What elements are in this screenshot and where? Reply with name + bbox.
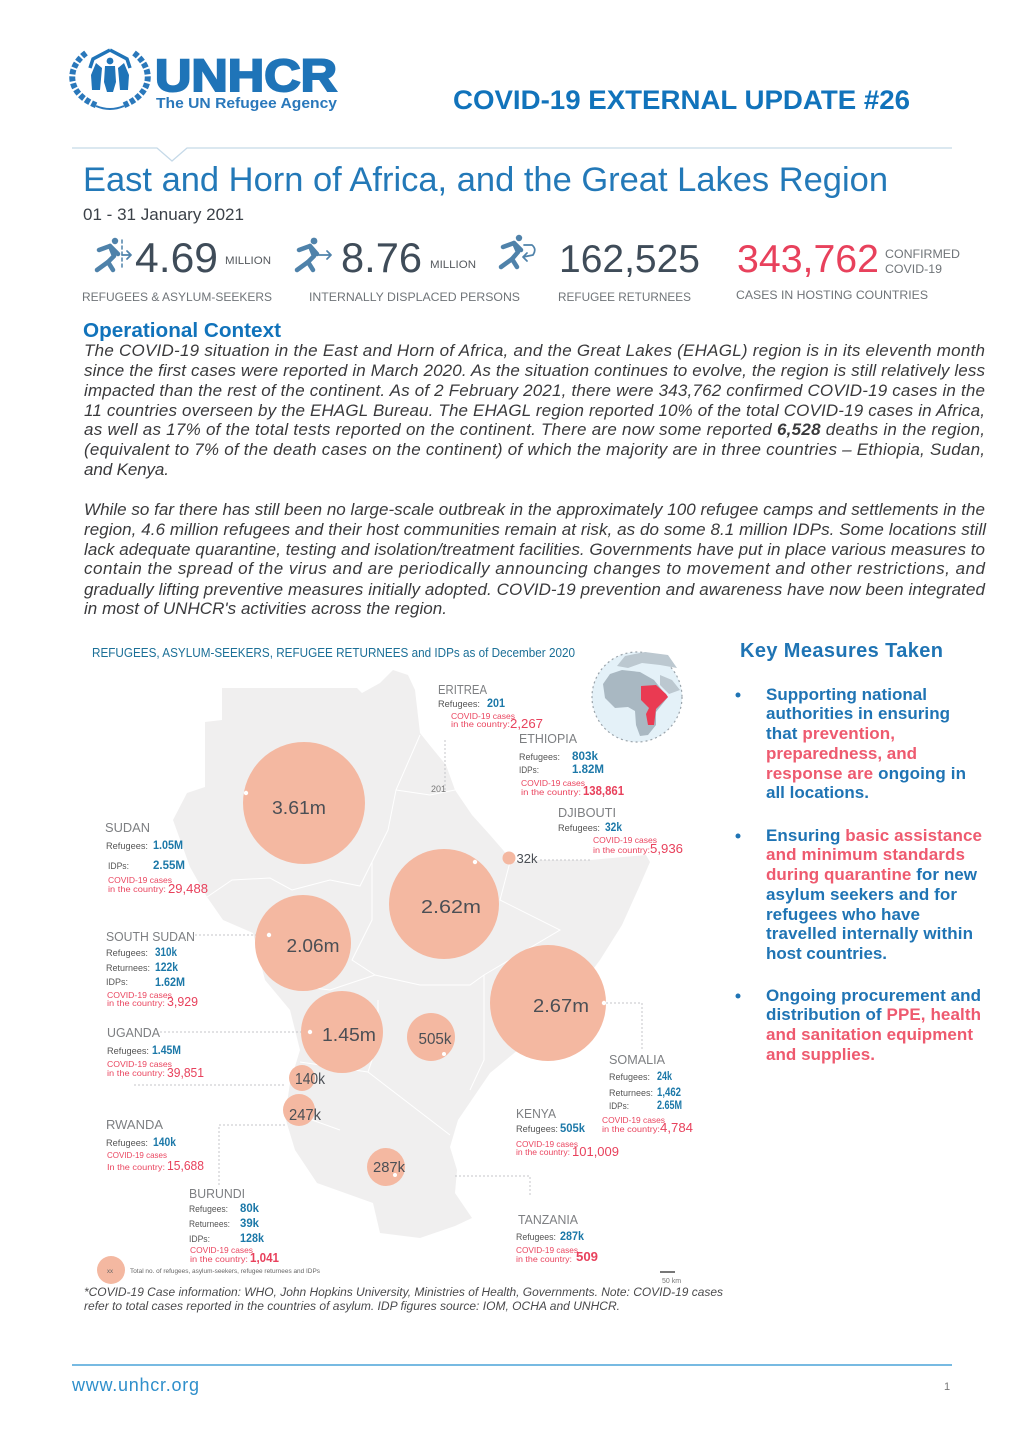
label: Eritrea on map: 201	[431, 784, 446, 794]
country panel: Ethiopia: ETHIOPIA	[519, 732, 578, 746]
bullet: procurement: Ongoing procurement and	[766, 986, 981, 1005]
country panel: Burundi: BURUNDI	[189, 1187, 245, 1201]
country panel: Tanzania: COVID-19 cases	[516, 1245, 578, 1255]
bullet: basic assistance: and minimum standards	[766, 845, 965, 864]
country panel: Sudan: 29,488	[168, 882, 208, 896]
country panel: Tanzania: TANZANIA	[518, 1213, 579, 1227]
country panel: Uganda	[107, 1026, 204, 1080]
country panel: Somalia: 2.65M	[657, 1100, 682, 1112]
Europe and Arabia	[617, 652, 680, 694]
footnote: *COVID-19 Case information: WHO, John Hopkins University, Ministries of Health, Governments. Note: COVID-19 cases	[84, 1287, 723, 1299]
text block: paragraph 1: (equivalent to 7% of the death cases on the continent) of which the majority are in three countries – Ethiopia, Sudan,	[84, 440, 985, 459]
bubble: Uganda: 1.45m	[322, 1025, 376, 1045]
bubble: Rwanda: 140k	[295, 1071, 326, 1088]
country panel: South Sudan: Refugees:	[106, 948, 148, 958]
country panel: South Sudan: 1.62M	[155, 977, 185, 989]
country panel: Tanzania: 509	[576, 1250, 598, 1264]
bullet: procurement	[736, 986, 981, 1064]
bullet: national authorities: response are ongoing in	[766, 764, 966, 783]
stat: internally displaced persons: 8.76	[341, 234, 422, 281]
bullet: national authorities: Supporting national	[766, 685, 927, 704]
Africa	[603, 670, 668, 736]
bubble: Djibouti	[502, 851, 538, 866]
bullet: basic assistance: host countries.	[766, 944, 887, 963]
country panel: Ethiopia	[519, 732, 624, 798]
stat: refugee returnees: REFUGEE RETURNEES	[558, 290, 691, 304]
scale bar: 50 km	[662, 1278, 681, 1285]
bullet: basic assistance: during quarantine for new	[766, 865, 978, 884]
icon: person with arrow	[297, 238, 331, 270]
bullet: national authorities: that prevention,	[766, 724, 895, 743]
country panel: Ethiopia: 138,861	[583, 784, 624, 798]
bubble: South Sudan: 2.06m	[286, 936, 340, 956]
text block: paragraph 1: since the first cases were reported in March 2020. As the situation continues to evolve, the region is still relatively less	[84, 361, 986, 380]
country panel: Tanzania: in the country:	[516, 1254, 572, 1264]
bullet: procurement: and sanitation equipment	[766, 1025, 973, 1044]
country panel: Rwanda: In the country:	[107, 1162, 165, 1172]
country panel: Djibouti: COVID-19 cases	[593, 835, 657, 845]
footnote: refer to total cases reported in the countries of asylum. IDP figures source: IOM, OCHA and UNHCR.	[84, 1301, 620, 1313]
stat: refugees and asylum-seekers: MILLION	[225, 255, 271, 267]
text block: paragraph 1: The COVID-19 situation in the East and Horn of Africa, and the Great Lakes (EHAGL) region is in its eleventh month	[84, 341, 985, 360]
country panel: Rwanda	[106, 1118, 204, 1173]
text block: paragraph 2: lack adequate quarantine, testing and isolation/treatment facilities. Governments have put in place various measures to	[84, 540, 985, 559]
stat: refugees and asylum-seekers: REFUGEES & ASYLUM-SEEKERS	[82, 290, 272, 304]
country panel: Somalia: COVID-19 cases	[602, 1115, 665, 1125]
country panel: Somalia: IDPs:	[609, 1101, 629, 1111]
wordmark: UNHCR	[155, 50, 337, 101]
land shape	[173, 670, 650, 1238]
country borders	[207, 735, 560, 1135]
bullet: basic assistance: refugees who have	[766, 905, 920, 924]
country panel: Ethiopia: 1.82M	[572, 764, 604, 776]
scale bar	[660, 1271, 681, 1285]
bubble: Tanzania	[367, 1148, 405, 1186]
country panel: Uganda: UGANDA	[107, 1026, 161, 1040]
stat: internally displaced persons: MILLION	[430, 259, 476, 271]
country panel: Somalia: 1,462	[657, 1087, 681, 1099]
country panel: Somalia	[602, 1053, 693, 1135]
country panel: South Sudan: COVID-19 cases	[107, 990, 172, 1000]
bubble: Djibouti: 32k	[516, 851, 538, 866]
stat: confirmed COVID-19 cases: COVID-19	[885, 262, 942, 276]
country panel: Sudan: 2.55M	[153, 860, 185, 872]
text block: paragraph 2: in most of UNHCR's activities across the region.	[84, 599, 447, 618]
list: key measures	[736, 685, 982, 1064]
map legend: xx	[107, 1269, 113, 1275]
text block: paragraph 1: and Kenya.	[84, 460, 169, 479]
stat: refugees and asylum-seekers: 4.69	[135, 234, 218, 281]
country panel: Somalia: Returnees:	[609, 1088, 653, 1098]
country panel: Kenya: Refugees:	[516, 1124, 558, 1134]
bullet: national authorities: authorities in ensuring	[766, 704, 950, 723]
text block: paragraph 1: impacted than the rest of the continent. As of 2 February 2021, there were 343,762 confirmed COVID-19 cases in the	[84, 381, 985, 400]
bullet: procurement: and supplies.	[766, 1045, 875, 1064]
country panel: Uganda: 1.45M	[152, 1045, 181, 1057]
country panel: Burundi: in the country:	[190, 1254, 248, 1264]
country panel: Somalia: Refugees:	[609, 1072, 650, 1082]
bubble: Tanzania: 287k	[373, 1159, 405, 1176]
title: East and Horn of Africa, and the Great Lakes Region	[83, 161, 888, 199]
country panel: Djibouti: 32k	[605, 822, 623, 834]
bubble: Ethiopia	[389, 849, 499, 959]
leader lines	[134, 740, 642, 1195]
country panel: Uganda: COVID-19 cases	[107, 1059, 172, 1069]
country panel: Burundi: Refugees:	[189, 1204, 228, 1214]
map legend	[97, 1256, 320, 1284]
country panel: Eritrea: Refugees:	[438, 699, 480, 709]
icon: UNHCR laurel and sheltering hands	[72, 50, 148, 109]
footer link: www.unhcr.org	[71, 1375, 199, 1395]
bubble: Kenya: 505k	[418, 1031, 452, 1048]
country panel: Burundi: COVID-19 cases	[190, 1245, 253, 1255]
tagline: The UN Refugee Agency	[156, 96, 337, 112]
country panel: Somalia: SOMALIA	[609, 1053, 666, 1067]
bullet: national authorities	[736, 685, 966, 802]
map legend: Total no. of refugees, asylum-seekers, refugee returnees and IDPs	[130, 1269, 320, 1275]
country panel: Uganda: in the country:	[107, 1068, 165, 1078]
bubble: Ethiopia: 2.62m	[421, 897, 481, 917]
bubble: Somalia: 2.67m	[533, 996, 589, 1016]
country panel: Tanzania: Refugees:	[516, 1232, 556, 1242]
country panel: Eritrea: 201	[487, 698, 506, 710]
country panel: Burundi: 80k	[240, 1203, 260, 1215]
report label: COVID-19 EXTERNAL UPDATE #26	[453, 85, 910, 115]
date: 01 - 31 January 2021	[83, 206, 244, 224]
country panel: Ethiopia: Refugees:	[519, 752, 560, 762]
bubble: Kenya	[407, 1013, 455, 1061]
country panel: Rwanda: 15,688	[167, 1159, 204, 1173]
heading: operational context: Operational Context	[83, 320, 281, 342]
country panel: Sudan: Refugees:	[106, 841, 148, 851]
country panel: Sudan: SUDAN	[105, 821, 150, 835]
country panel: Djibouti	[558, 806, 683, 856]
country panel: Tanzania: 287k	[560, 1231, 585, 1243]
bullet: basic assistance: Ensuring basic assistance	[766, 826, 982, 845]
bubble: Burundi: 247k	[289, 1107, 322, 1124]
stat: confirmed COVID-19 cases: CASES IN HOSTING COUNTRIES	[736, 288, 928, 302]
country panel: Uganda: Refugees:	[107, 1046, 149, 1056]
country panel: Kenya: 505k	[560, 1123, 586, 1135]
stat: refugee returnees	[501, 235, 700, 304]
bullet: basic assistance	[736, 826, 982, 963]
country panel: Sudan: 1.05M	[153, 840, 183, 852]
map: region with bubbles	[134, 670, 650, 1238]
country panel: Kenya	[516, 1107, 619, 1159]
map title: REFUGEES, ASYLUM-SEEKERS, REFUGEE RETURNEES and IDPs as of December 2020	[92, 646, 575, 660]
country panel: Eritrea: 2,267	[510, 717, 543, 731]
country panel: Ethiopia: COVID-19 cases	[521, 778, 585, 788]
text block: paragraph 2	[84, 500, 987, 618]
country panel: Ethiopia: 803k	[572, 751, 599, 763]
country panel: Ethiopia: in the country:	[521, 787, 581, 797]
country panel: South Sudan	[106, 930, 198, 1009]
country panel: Burundi: Returnees:	[189, 1219, 230, 1229]
region highlight	[641, 685, 668, 725]
inset globe	[592, 652, 682, 742]
bubble: Somalia	[490, 945, 606, 1061]
country panel: Kenya: 101,009	[572, 1145, 619, 1159]
country panel: South Sudan: 122k	[155, 962, 179, 974]
text block: paragraph 2: While so far there has still been no large-scale outbreak in the approximately 100 refugee camps and settlements in the	[84, 500, 985, 519]
country panel: Somalia: 4,784	[660, 1121, 693, 1135]
stat: confirmed COVID-19 cases: CONFIRMED	[885, 247, 960, 261]
bubble: South Sudan	[255, 895, 351, 991]
logo: UNHCR	[72, 50, 337, 112]
text block: paragraph 2: gradually lifting preventive measures initially adopted. COVID-19 prevention and awareness have now been integrated	[84, 580, 986, 599]
bubble: Rwanda	[289, 1065, 326, 1091]
country panel: Eritrea	[438, 683, 543, 731]
stat: refugees and asylum-seekers	[82, 234, 272, 304]
text block: paragraph 2: region, 4.6 million refugees and their host communities remain at risk, as do some 8.1 million IDPs. Some locations still	[84, 520, 987, 539]
page number: 1	[944, 1381, 950, 1393]
heading: key measures taken: Key Measures Taken	[740, 640, 943, 662]
bullet: basic assistance: asylum seekers and for	[766, 885, 957, 904]
country panel: Burundi: 1,041	[250, 1251, 279, 1265]
country panel: Rwanda: COVID-19 cases	[107, 1150, 167, 1160]
country panel: Eritrea: in the country:	[451, 719, 510, 729]
footnote	[84, 1287, 723, 1313]
country panel: Tanzania	[516, 1213, 598, 1264]
country panel: Rwanda: Refugees:	[106, 1138, 148, 1148]
country panel: Ethiopia: IDPs:	[519, 765, 539, 775]
country panel: Eritrea: ERITREA	[438, 683, 488, 697]
text block: paragraph 1: as well as 17% of the total tests reported on the continent. There are now some reported 6,528 deaths in the region,	[84, 420, 985, 439]
country panel: South Sudan: IDPs:	[106, 977, 128, 987]
bullet: procurement: distribution of PPE, health	[766, 1005, 981, 1024]
country panel: Djibouti: DJIBOUTI	[558, 806, 616, 820]
icon: person crossing border	[97, 238, 131, 270]
country panel: Sudan	[105, 821, 208, 896]
country panel: Burundi: 39k	[240, 1218, 260, 1230]
stat: internally displaced persons: INTERNALLY DISPLACED PERSONS	[309, 290, 520, 304]
country panel: South Sudan: 3,929	[167, 995, 198, 1009]
country panel: South Sudan: SOUTH SUDAN	[106, 930, 195, 944]
text block: paragraph 2: contain the spread of the virus and are periodically announcing changes to movement and other restrictions, and	[84, 559, 986, 578]
country panel: Eritrea: COVID-19 cases	[451, 711, 515, 721]
country panel: Burundi: 128k	[240, 1233, 265, 1245]
country panel: Kenya: in the country:	[516, 1147, 570, 1157]
country panel: Sudan: in the country:	[108, 884, 166, 894]
country panel: Burundi: IDPs:	[189, 1234, 210, 1244]
bubble: Sudan: 3.61m	[272, 798, 326, 818]
country panel: Djibouti: Refugees:	[558, 823, 600, 833]
bullet: national authorities: preparedness, and	[766, 744, 917, 763]
text block: paragraph 1	[84, 341, 986, 479]
bubble: Burundi	[283, 1094, 322, 1126]
country panel: Djibouti: 5,936	[650, 842, 683, 856]
icon: person with return arrow	[501, 235, 535, 267]
bubble: Uganda	[301, 991, 383, 1073]
country panel: Kenya: COVID-19 cases	[516, 1139, 578, 1149]
country panel: Sudan: IDPs:	[108, 861, 129, 871]
bullet: national authorities: all locations.	[766, 783, 869, 802]
stat: refugee returnees: 162,525	[559, 238, 700, 281]
stat: confirmed COVID-19 cases: 343,762	[737, 238, 879, 281]
country panel: Rwanda: RWANDA	[106, 1118, 164, 1132]
country panel: Uganda: 39,851	[167, 1066, 204, 1080]
header rule with chevron	[72, 148, 952, 161]
stat: confirmed COVID-19 cases	[736, 238, 960, 302]
country panel: Djibouti: in the country:	[593, 845, 650, 855]
footer rule	[72, 1364, 952, 1366]
stat: internally displaced persons	[297, 234, 520, 304]
country panel: Burundi	[189, 1187, 279, 1265]
country panel: Rwanda: 140k	[153, 1137, 177, 1149]
bullet: basic assistance: travelled internally within	[766, 924, 973, 943]
country panel: South Sudan: 310k	[155, 947, 178, 959]
country panel: Kenya: KENYA	[516, 1107, 557, 1121]
country panel: Sudan: COVID-19 cases	[108, 875, 172, 885]
country panel: Somalia: 24k	[657, 1071, 672, 1083]
country panel: Somalia: in the country:	[602, 1124, 660, 1134]
country panel: South Sudan: Returnees:	[106, 963, 150, 973]
bubble: Sudan	[243, 742, 365, 864]
text block: paragraph 1: 11 countries overseen by the EHAGL Bureau. The EHAGL region reported 10% of the total COVID-19 cases in Africa,	[84, 401, 985, 420]
country panel: South Sudan: in the country:	[107, 998, 165, 1008]
